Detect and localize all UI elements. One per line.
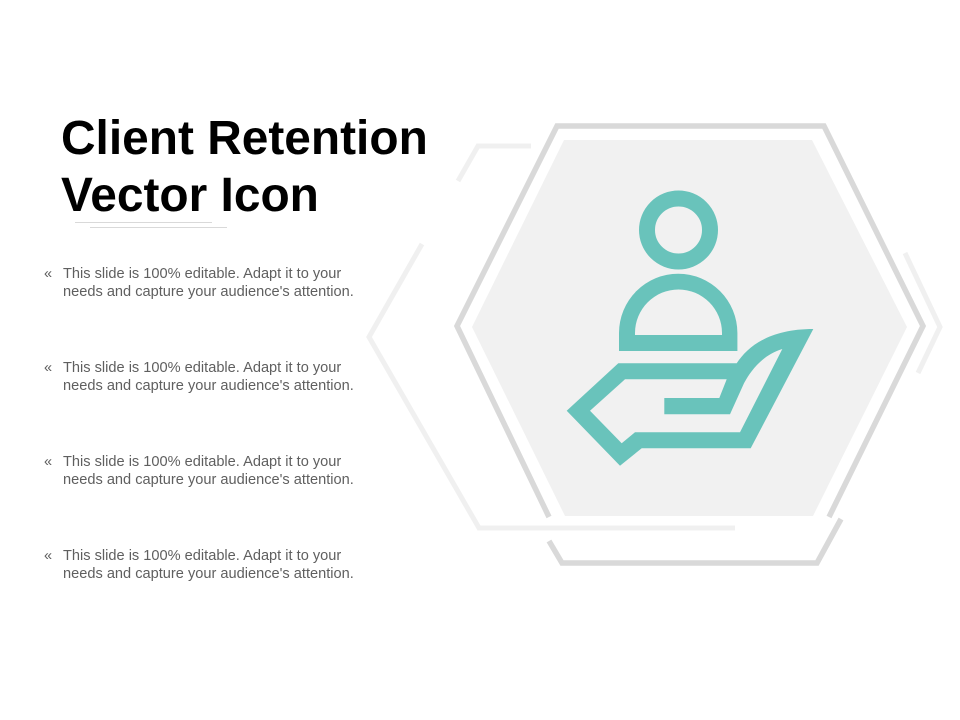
bullet text 2: « [44,360,52,376]
light outer hexagon fragments [369,146,940,528]
title: Vector Icon [61,169,319,222]
hexagon fill panel [472,140,907,516]
icon: head [647,198,710,262]
gray hexagon outline [457,126,923,563]
bullet text 4: needs and capture your audience's attention. [63,566,354,582]
title [61,112,428,222]
bullet text 4: « [44,548,52,564]
bullet text 1: needs and capture your audience's attention. [63,284,354,300]
bullet text 1: This slide is 100% editable. Adapt it to your [63,266,341,282]
bullet text 3: « [44,454,52,470]
title underline [75,222,227,228]
bullet text 1 [44,266,354,300]
icon: shoulders [619,274,737,351]
bullet text 2: This slide is 100% editable. Adapt it to your [63,360,341,376]
bullet text 4 [44,548,354,582]
bullet text 2: needs and capture your audience's attention. [63,378,354,394]
bullet text 3: This slide is 100% editable. Adapt it to your [63,454,341,470]
bullet text 3: needs and capture your audience's attention. [63,472,354,488]
title: Client Retention [61,112,428,165]
bullet text 2 [44,360,354,394]
bullet text 1: « [44,266,52,282]
icon: open hand [567,329,813,466]
bullet text 4: This slide is 100% editable. Adapt it to your [63,548,341,564]
bullet text 3 [44,454,354,488]
icon: client in open hand [567,198,813,466]
